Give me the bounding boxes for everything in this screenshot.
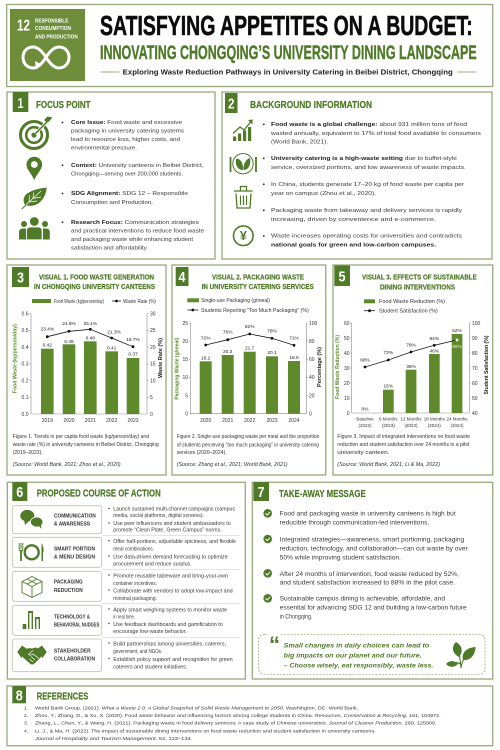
heading: proposed course of action: 6 bbox=[16, 484, 23, 501]
heading: proposed course of action bbox=[12, 482, 161, 501]
reference 1: World Bank Group. (2021). What a Waste 2.0: A Global Snapshot of Solid Waste Management to 2050. Washington, DC: World Bank. bbox=[35, 705, 358, 711]
bar and line chart: 0.3 bbox=[22, 362, 29, 368]
bar and line chart: 2019 bbox=[42, 418, 53, 424]
heading: background information bbox=[225, 93, 372, 113]
bar and line chart: 80 bbox=[309, 339, 315, 345]
action: stakeholder collaboration: STAKEHOLDER bbox=[54, 649, 91, 655]
icon: rising bar chart bbox=[233, 120, 253, 141]
reference 3: Zhang, L., Chen, Y., & Wang, H. (2021). Packaging waste in food delivery services: A case study of Chinese universities. Journal of Cleaner Production, 290, 125800. bbox=[35, 721, 437, 727]
takeaway 3: and student satisfaction increased to 88% in the pilot case. bbox=[280, 581, 455, 587]
bar and line chart: 0.45 bbox=[64, 339, 74, 345]
bar and line chart: (2024) bbox=[450, 423, 464, 428]
bar and line chart bbox=[12, 312, 164, 424]
bar and line chart: 60 bbox=[472, 381, 478, 387]
caption: figure 1: (Source: World Bank, 2021; Zhou et al., 2020) bbox=[13, 462, 121, 468]
text: research focus: and practical interventions to reduce food waste bbox=[71, 229, 204, 235]
bar and line chart: 24.8% bbox=[62, 321, 77, 327]
bar and line chart: (2023) bbox=[404, 423, 418, 428]
legend: Food Waste (kg/person/day) bbox=[54, 299, 104, 305]
bar and line chart: Percentage (%) bbox=[317, 347, 323, 387]
bar and line chart: 73% bbox=[383, 350, 394, 356]
takeaway 4: essential for advancing SDG 12 and building a low-carbon future bbox=[280, 605, 467, 611]
text: core issue: packaging in university catering systems bbox=[71, 129, 184, 135]
legend: Students Reporting “Too Much Packaging” (%) bbox=[201, 308, 309, 314]
bar and line chart: 23.4% bbox=[40, 327, 55, 333]
bar and line chart: 79% bbox=[406, 342, 417, 348]
icon: bowl with leaf and cutlery bbox=[230, 154, 256, 174]
action: packaging reduction: REDUCTION bbox=[54, 588, 83, 594]
bar and line chart: 88% bbox=[452, 344, 463, 350]
text: core issue: Core Issue: Food waste and excessive bbox=[71, 120, 182, 126]
text: operating costs: Waste increases operating costs for universities and contradicts bbox=[271, 234, 462, 240]
bar and line chart: 35% bbox=[406, 364, 417, 370]
heading: proposed course of action: PROPOSED COURSE OF ACTION bbox=[37, 488, 161, 500]
text: context: Context: University canteens in Beibei District, bbox=[71, 163, 204, 169]
bar and line chart bbox=[174, 321, 323, 424]
bar and line chart: 72% bbox=[201, 335, 211, 341]
action: technology and behavioral nudges: encourage low-waste behavior. bbox=[113, 629, 187, 635]
bar and line chart: 18.6 bbox=[289, 355, 299, 361]
text: SDG alignment: Consumption and Production. bbox=[71, 200, 153, 206]
action: smart portion and menu design bbox=[12, 537, 236, 568]
caption: figure 3: university canteen. bbox=[337, 450, 389, 456]
action: smart portion and menu design: Offer half-portions, adjustable spiciness, and flexible bbox=[113, 539, 236, 545]
heading: visual 3: 5 bbox=[338, 268, 346, 286]
action: technology and behavioral nudges bbox=[12, 605, 227, 635]
bar and line chart: 15 bbox=[182, 357, 188, 363]
caption: figure 1: (2019–2023). bbox=[13, 450, 43, 456]
legend bbox=[32, 299, 156, 305]
bar and line chart: 25 bbox=[182, 321, 188, 327]
panel: proposed course of action bbox=[7, 482, 245, 679]
action: technology and behavioral nudges: Use feedback dashboards and gamification to bbox=[113, 622, 223, 628]
bar and line chart: Food Waste Reduction (%) bbox=[335, 335, 341, 399]
heading: visual 2: 4 bbox=[178, 269, 186, 286]
bar and line chart: 70 bbox=[472, 366, 478, 372]
icon: trash bin bbox=[234, 186, 253, 208]
bar and line chart: (2022) bbox=[358, 423, 372, 428]
bar and line chart: 20 bbox=[344, 381, 350, 387]
callout: quote: “ bbox=[269, 632, 280, 657]
heading: background information: 2 bbox=[228, 96, 234, 112]
action: communication and awareness bbox=[12, 506, 235, 534]
caption: figure 1 bbox=[13, 434, 159, 468]
panel: background information bbox=[222, 92, 492, 259]
caption: figure 3 bbox=[337, 434, 470, 468]
bar and line chart: 15 bbox=[150, 362, 156, 368]
caption: figure 2: services (2020–2024). bbox=[177, 450, 227, 456]
action: communication and awareness: & AWARENESS bbox=[54, 521, 90, 527]
action: smart portion and menu design: SMART PORTION bbox=[54, 546, 95, 552]
text: research focus: and packaging waste while enhancing student bbox=[71, 237, 193, 243]
action: packaging reduction: Collaborate with vendors to adopt low-impact and bbox=[113, 589, 233, 595]
heading: visual 1: IN CHONGQING UNIVERSITY CANTEENS bbox=[34, 282, 155, 291]
bar and line chart: 2022 bbox=[244, 418, 255, 424]
reference 4: Li, J., & Ma, H. (2022). The impact of sustainable dining interventions on food waste reduction and student satisfaction in university canteens. bbox=[35, 729, 376, 735]
action: packaging reduction bbox=[12, 571, 233, 602]
bar and line chart: 10 bbox=[150, 378, 156, 384]
bar and line chart: 52% bbox=[452, 328, 463, 334]
icon: leaf bbox=[22, 188, 47, 209]
bar and line chart: 100 bbox=[472, 321, 481, 327]
heading: focus point: 1 bbox=[18, 95, 24, 112]
panel: visual 3 effects of interventions bbox=[333, 265, 493, 475]
heading: references: 8 bbox=[16, 688, 23, 704]
icon: handshake bbox=[17, 646, 47, 665]
bar and line chart: 40 bbox=[309, 375, 315, 381]
heading: visual 2: VISUAL 2. PACKAGING WASTE bbox=[212, 272, 304, 281]
action: packaging reduction: container incentives. bbox=[113, 581, 157, 587]
caption: figure 2: Figure 2. Single-use packaging waste per meal and the proportion bbox=[177, 434, 319, 440]
takeaway 3: After 24 months of intervention, food waste reduced by 52%, bbox=[280, 572, 459, 578]
text: SDG alignment bbox=[62, 191, 188, 206]
action: smart portion and menu design: meal combinations. bbox=[113, 547, 154, 553]
text: high-waste setting bbox=[263, 156, 466, 171]
bar and line chart: 0.42 bbox=[43, 343, 52, 349]
bar and line chart: 5 bbox=[150, 395, 153, 401]
heading: visual 2 bbox=[176, 267, 314, 291]
takeaway 1 bbox=[263, 509, 456, 526]
panel: visual 2 packaging waste bbox=[172, 265, 326, 475]
bar and line chart: 78% bbox=[267, 328, 278, 334]
bar and line chart: Student Satisfaction (%) bbox=[484, 335, 490, 394]
bar and line chart: (2024) bbox=[428, 423, 441, 428]
bar and line chart: 18 Months bbox=[424, 416, 446, 421]
bar and line chart: 0 bbox=[309, 412, 312, 418]
text: core issue bbox=[62, 120, 184, 152]
reference 4: 4. bbox=[24, 729, 28, 735]
reference 3: 3. bbox=[24, 721, 28, 727]
bar and line chart: 0 bbox=[150, 412, 153, 418]
text: context: Chongqing—serving over 200,000 students. bbox=[71, 172, 183, 178]
bar and line chart: 21.3% bbox=[107, 329, 122, 335]
bar and line chart: 2021 bbox=[85, 418, 96, 424]
heading: visual 2: IN UNIVERSITY CATERING SERVICES bbox=[202, 282, 314, 291]
reference 2: 2. bbox=[24, 713, 28, 719]
bar and line chart: 60 bbox=[344, 321, 350, 327]
bar and line chart: 20 bbox=[309, 393, 315, 399]
heading: visual 1 bbox=[12, 267, 155, 291]
text: global challenge bbox=[263, 122, 481, 146]
bar and line chart: 82% bbox=[245, 324, 255, 330]
reference 1: 1. bbox=[24, 705, 28, 711]
action: communication and awareness: promote “Clean Plate, Green Campus” norms. bbox=[113, 528, 222, 534]
bar and line chart: 80 bbox=[472, 351, 478, 357]
heading: take-away message: TAKE-AWAY MESSAGE bbox=[279, 488, 366, 500]
bar and line chart: 0.5 bbox=[22, 328, 29, 334]
bar and line chart: 0 bbox=[185, 412, 188, 418]
action: stakeholder collaboration: caterers and student initiatives. bbox=[113, 665, 188, 671]
action: stakeholder collaboration: COLLABORATION bbox=[54, 657, 95, 663]
bar and line chart: 18.2 bbox=[201, 355, 211, 361]
bar and line chart: 84% bbox=[429, 336, 440, 342]
action: stakeholder collaboration: Establish policy support and recognition for green bbox=[113, 657, 233, 663]
bar and line chart: 40 bbox=[472, 411, 478, 417]
tagline: Exploring Waste Reduction Pathways in University Catering in Beibei District, Chongqing bbox=[123, 68, 453, 77]
reference 4 bbox=[24, 729, 376, 742]
text: China per capita bbox=[263, 182, 464, 197]
bar and line chart: 20 bbox=[150, 345, 156, 351]
bar and line chart: 2023 bbox=[266, 418, 278, 424]
takeaway 1: reducible through communication-led interventions. bbox=[280, 520, 430, 526]
bar and line chart: 0.2 bbox=[22, 378, 29, 384]
action: smart portion and menu design: Use data-driven demand forecasting to optimize bbox=[113, 554, 228, 560]
caption: figure 2 bbox=[177, 434, 319, 468]
text: high-waste setting: service, oversized portions, and low awareness of waste impacts. bbox=[271, 165, 466, 171]
icon: plate and cutlery bbox=[19, 543, 44, 561]
icon: target bbox=[20, 116, 52, 148]
text: operating costs: national goals for green and low-carbon campuses. bbox=[271, 242, 436, 248]
icon: yen coin: ¥ bbox=[240, 229, 247, 243]
action: communication and awareness: media, social platforms, digital screens). bbox=[113, 513, 204, 519]
text: global challenge: Food waste is a global challenge: about 931 million tons of food bbox=[271, 122, 467, 128]
takeaway 2: 50% while improving student satisfaction. bbox=[280, 555, 401, 561]
heading: focus point bbox=[13, 92, 91, 112]
takeaway 2: Integrated strategies—awareness, smart portioning, packaging bbox=[280, 538, 464, 544]
text: China per capita: In China, students generate 17–20 kg of food waste per capita per bbox=[271, 182, 464, 188]
bar and line chart: 2024 bbox=[288, 418, 300, 424]
legend: Single-use Packaging (g/meal) bbox=[201, 298, 270, 304]
heading: visual 3: VISUAL 3. EFFECTS OF SUSTAINABLE bbox=[362, 273, 477, 282]
action: communication and awareness: Use peer influencers and student ambassadors to bbox=[113, 521, 231, 527]
icon: SDG 12 badge bbox=[10, 9, 85, 81]
callout: quote: – Choose wisely, eat responsibly, waste less. bbox=[284, 662, 434, 669]
action: technology and behavioral nudges: Apply smart weighing systems to monitor waste bbox=[113, 607, 227, 613]
text: global challenge: (World Bank, 2021). bbox=[271, 140, 328, 146]
caption: figure 3: reduction and student satisfaction over 24 months in a pilot bbox=[337, 442, 470, 448]
bar and line chart: 2020 bbox=[200, 418, 211, 424]
bar and line chart: Food Waste (kg/person/day) bbox=[12, 324, 18, 393]
icon: box bbox=[22, 576, 42, 598]
action: packaging reduction: minimal packaging. bbox=[113, 596, 157, 602]
text: context bbox=[62, 163, 204, 178]
heading: visual 3: DINING INTERVENTIONS bbox=[380, 282, 455, 291]
bar and line chart: 21.7 bbox=[245, 346, 255, 352]
text: packaging waste: Packaging waste from takeaway and delivery services is rapidly bbox=[271, 208, 462, 214]
heading: focus point: FOCUS POINT bbox=[36, 99, 91, 111]
bar and line chart: 50 bbox=[472, 396, 478, 402]
reference 4: Journal of Hospitality and Tourism Management, 52, 123–134. bbox=[34, 736, 192, 742]
text: research focus bbox=[62, 220, 204, 252]
bar and line chart: 30 bbox=[150, 312, 156, 318]
bar and line chart: 2020 bbox=[63, 418, 75, 424]
action: technology and behavioral nudges: TECHNOLOGY & bbox=[54, 614, 90, 620]
action: packaging reduction: Promote reusable tableware and bring-your-own bbox=[113, 574, 228, 580]
icon: plant bbox=[446, 642, 476, 668]
action: technology and behavioral nudges: in real time. bbox=[113, 614, 135, 620]
bar and line chart: 68% bbox=[360, 357, 371, 363]
heading: references: REFERENCES bbox=[37, 690, 88, 702]
legend: Student Satisfaction (%) bbox=[379, 308, 438, 314]
heading: visual 3 bbox=[334, 266, 477, 291]
action: stakeholder collaboration bbox=[12, 639, 233, 672]
bar and line chart: 12 Months bbox=[400, 416, 422, 421]
icon: map pin bbox=[26, 157, 42, 180]
caption: figure 2: (Source: Zhang et al., 2021; World Bank, 2021) bbox=[177, 462, 288, 468]
icon: SDG 12 badge: AND PRODUCTION bbox=[35, 34, 78, 40]
legend bbox=[187, 298, 309, 314]
action: packaging reduction: PACKAGING bbox=[54, 580, 83, 586]
heading: references bbox=[12, 686, 88, 704]
panel: visual 1 food waste generation bbox=[7, 265, 166, 475]
takeaway 4 bbox=[263, 594, 467, 620]
legend: Waste Rate (%) bbox=[123, 299, 156, 305]
bar and line chart: 10 bbox=[344, 396, 350, 402]
icon: SDG 12 badge: 12 bbox=[17, 18, 30, 34]
takeaway 1: Food and packaging waste in university canteens is high but bbox=[280, 512, 456, 518]
caption: figure 3: (Source: World Bank, 2021; Li & Ma, 2022) bbox=[337, 462, 440, 468]
bar and line chart: 100 bbox=[309, 321, 318, 327]
bar and line chart: 2023 bbox=[127, 418, 139, 424]
bar and line chart: Baseline bbox=[356, 416, 374, 421]
action: smart portion and menu design: procurement and reduce surplus. bbox=[113, 562, 192, 568]
bar and line chart: 24 Months bbox=[446, 416, 468, 421]
bar and line chart: 5 bbox=[185, 393, 188, 399]
heading: background information: BACKGROUND INFORMATION bbox=[250, 99, 372, 111]
bar and line chart: 2022 bbox=[106, 418, 117, 424]
takeaway 3 bbox=[263, 569, 459, 587]
bar and line chart: 25.1% bbox=[83, 321, 98, 327]
panel: take-away message bbox=[252, 482, 493, 679]
heading: visual 1: 3 bbox=[17, 270, 24, 286]
callout: quote bbox=[258, 630, 485, 674]
bar and line chart: 0.4 bbox=[22, 345, 29, 351]
bar and line chart: 40 bbox=[344, 351, 350, 357]
action: technology and behavioral nudges: BEHAVIORAL NUDGES bbox=[54, 622, 99, 628]
bar and line chart: 20 bbox=[182, 339, 188, 345]
legend bbox=[364, 299, 445, 314]
bar and line chart: 0.0 bbox=[22, 412, 29, 418]
bar and line chart: 46% bbox=[429, 348, 440, 354]
icon: speech bubbles bbox=[20, 510, 43, 529]
caption: figure 3: Figure 3. Impact of integrated interventions on food waste bbox=[337, 434, 470, 440]
text: packaging waste: increasing, driven by convenience and e-commerce. bbox=[271, 217, 437, 223]
bar and line chart: 71% bbox=[289, 336, 300, 342]
bar and line chart: 20.1 bbox=[267, 350, 277, 356]
bar and line chart: 10 bbox=[182, 375, 188, 381]
text: research focus: satisfaction and affordability. bbox=[71, 246, 148, 252]
bar and line chart: 0.48 bbox=[86, 336, 95, 342]
text: SDG alignment: SDG Alignment: SDG 12 – Responsible bbox=[71, 191, 188, 197]
bar and line chart: 15% bbox=[383, 384, 394, 390]
bar and line chart: 25 bbox=[150, 328, 156, 334]
bar and line chart: 18.7% bbox=[126, 337, 141, 343]
bar and line chart: 2021 bbox=[222, 418, 233, 424]
text: core issue: lead to resource loss, higher costs, and bbox=[71, 137, 180, 143]
text: packaging waste bbox=[263, 208, 462, 223]
icon: people bbox=[19, 217, 50, 240]
icon: yen coin bbox=[234, 226, 253, 246]
action: stakeholder collaboration: Build partnerships among universities, caterers, bbox=[113, 641, 226, 647]
action: communication and awareness: COMMUNICATION bbox=[54, 514, 96, 520]
text: high-waste setting: University catering is a high-waste setting due to buffet-style bbox=[271, 156, 457, 162]
heading: take-away message: 7 bbox=[258, 484, 264, 501]
bar and line chart: 30 bbox=[344, 366, 350, 372]
text: operating costs bbox=[263, 234, 462, 248]
action: smart portion and menu design: & MENU DESIGN bbox=[54, 554, 95, 560]
callout: quote: big impacts on our planet and our future. bbox=[284, 653, 422, 660]
takeaway 2: reduction, technology, and collaboration—can cut waste by over bbox=[280, 546, 468, 552]
icon: SDG 12 badge: CONSUMPTION bbox=[35, 26, 71, 32]
bar and line chart: 0.41 bbox=[107, 346, 117, 352]
bar and line chart: 6 Months bbox=[379, 416, 398, 421]
text: research focus: Research Focus: Communication strategies bbox=[71, 220, 199, 226]
action: communication and awareness: Launch sustained multi-channel campaigns (campus bbox=[113, 507, 235, 513]
icon: smart meter bars bbox=[23, 611, 40, 629]
caption: figure 1: Figure 1. Trends in per capita food waste (kg/person/day) and bbox=[13, 434, 149, 440]
reference 2: Zhou, Y., Zhang, D., & Xu, X. (2020). Food waste behavior and influencing factors among college students in China. Resources, Conservation & Recycling, 161, 104972. bbox=[35, 713, 441, 719]
bar and line chart: 0% bbox=[362, 406, 369, 412]
bar and line chart: 76% bbox=[223, 330, 233, 336]
bar and line chart: Packaging Waste (g/meal) bbox=[174, 337, 180, 400]
takeaway 4: in Chongqing. bbox=[280, 614, 313, 620]
bar and line chart: (2023) bbox=[382, 423, 395, 428]
takeaway 2 bbox=[263, 535, 468, 561]
bar and line chart: 50 bbox=[344, 336, 350, 342]
bar and line chart: 90 bbox=[472, 336, 478, 342]
bar and line chart: Waste Rate (%) bbox=[158, 338, 164, 378]
text: core issue: environmental pressure. bbox=[71, 146, 137, 152]
text: global challenge: wasted annually, equivalent to 17% of total food available to consumers bbox=[270, 131, 481, 137]
legend: Food Waste Reduction (%) bbox=[379, 299, 445, 305]
callout: quote: Small changes in daily choices can lead to bbox=[284, 643, 429, 650]
bar and line chart: 0.37 bbox=[128, 352, 138, 358]
bar and line chart: 20.3 bbox=[223, 349, 233, 355]
bar and line chart: 0 bbox=[347, 411, 350, 417]
heading: visual 1: VISUAL 1. FOOD WASTE GENERATION bbox=[39, 272, 154, 281]
caption: figure 2: of students perceiving “too much packaging” in university catering bbox=[177, 442, 319, 448]
icon: SDG 12 badge: RESPONSIBLE bbox=[35, 18, 69, 24]
bar and line chart: 60 bbox=[309, 357, 315, 363]
bar and line chart: 0.1 bbox=[22, 395, 29, 401]
bar and line chart: 0.6 bbox=[22, 312, 29, 318]
panel: references bbox=[7, 686, 493, 746]
caption: figure 1: waste rate (%) in university canteens in Beibei District, Chongqing bbox=[13, 442, 159, 448]
bar and line chart bbox=[335, 321, 490, 428]
header banner bbox=[7, 4, 493, 86]
text: China per capita: year on campus (Zhou et al., 2020). bbox=[271, 191, 376, 197]
action: stakeholder collaboration: government, and NGOs. bbox=[113, 649, 163, 655]
heading: take-away message bbox=[253, 482, 366, 501]
panel: focus point bbox=[7, 92, 215, 259]
takeaway 4: Sustainable campus dining is achievable, affordable, and bbox=[280, 597, 445, 603]
